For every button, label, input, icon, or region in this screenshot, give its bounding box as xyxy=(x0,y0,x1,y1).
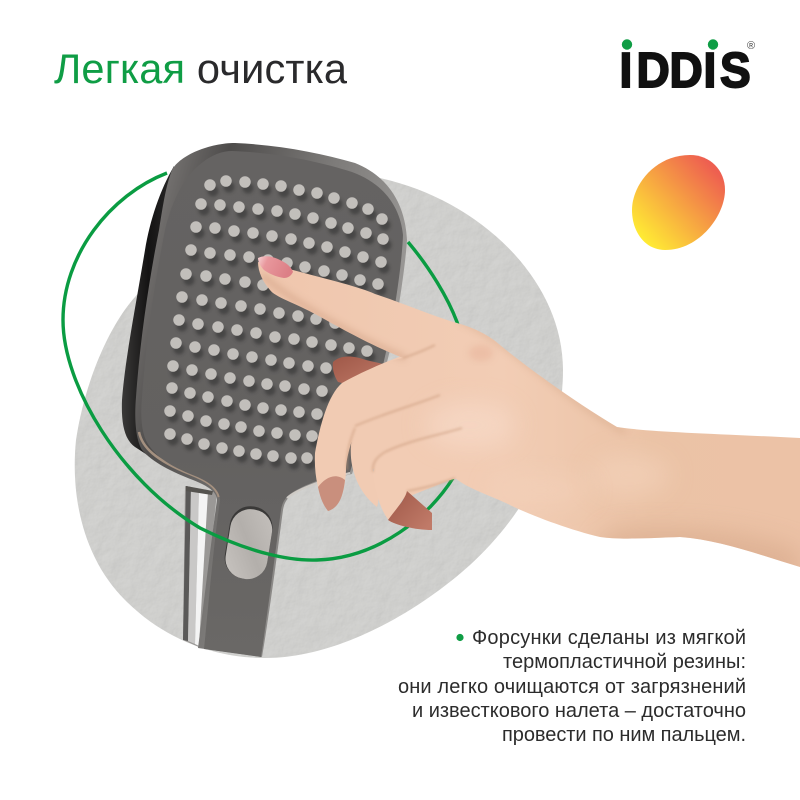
nozzle shadows xyxy=(173,187,386,464)
button recess xyxy=(222,503,276,582)
logo: IDDIS: IDDIS xyxy=(620,44,751,98)
description text: и известкового налета – достаточно xyxy=(412,700,746,722)
head rim and handle xyxy=(135,143,407,657)
skin shading xyxy=(262,275,800,590)
description text: Форсунки сделаны из мягкой xyxy=(472,627,746,649)
button xyxy=(223,506,275,582)
index finger nail xyxy=(258,256,293,278)
gradient blob xyxy=(632,155,725,250)
finger creases xyxy=(347,345,462,491)
side band xyxy=(122,166,175,458)
description text: провести по ним пальцем. xyxy=(502,724,746,746)
thumb xyxy=(333,356,400,385)
description text: они легко очищаются от загрязнений xyxy=(398,676,746,698)
logo: IDDIS: ® xyxy=(747,40,755,52)
green bullet xyxy=(456,634,464,641)
little finger xyxy=(373,425,480,522)
description text: термопластичной резины: xyxy=(503,651,746,673)
chrome hose xyxy=(183,486,217,648)
green ring xyxy=(63,173,470,560)
title: Легкая очистка xyxy=(54,45,348,92)
lower rim highlight xyxy=(139,432,219,497)
ring finger xyxy=(351,395,460,507)
middle finger nail xyxy=(318,476,345,511)
arm palm and index finger xyxy=(258,262,800,567)
middle finger xyxy=(315,345,445,511)
face plate xyxy=(141,151,403,657)
shower head xyxy=(122,143,407,657)
little finger nail xyxy=(388,491,432,530)
plate lower edge highlight xyxy=(287,473,350,498)
hand xyxy=(258,256,800,590)
nozzles xyxy=(170,181,383,458)
description text xyxy=(398,627,746,746)
stone background blob xyxy=(75,176,563,658)
